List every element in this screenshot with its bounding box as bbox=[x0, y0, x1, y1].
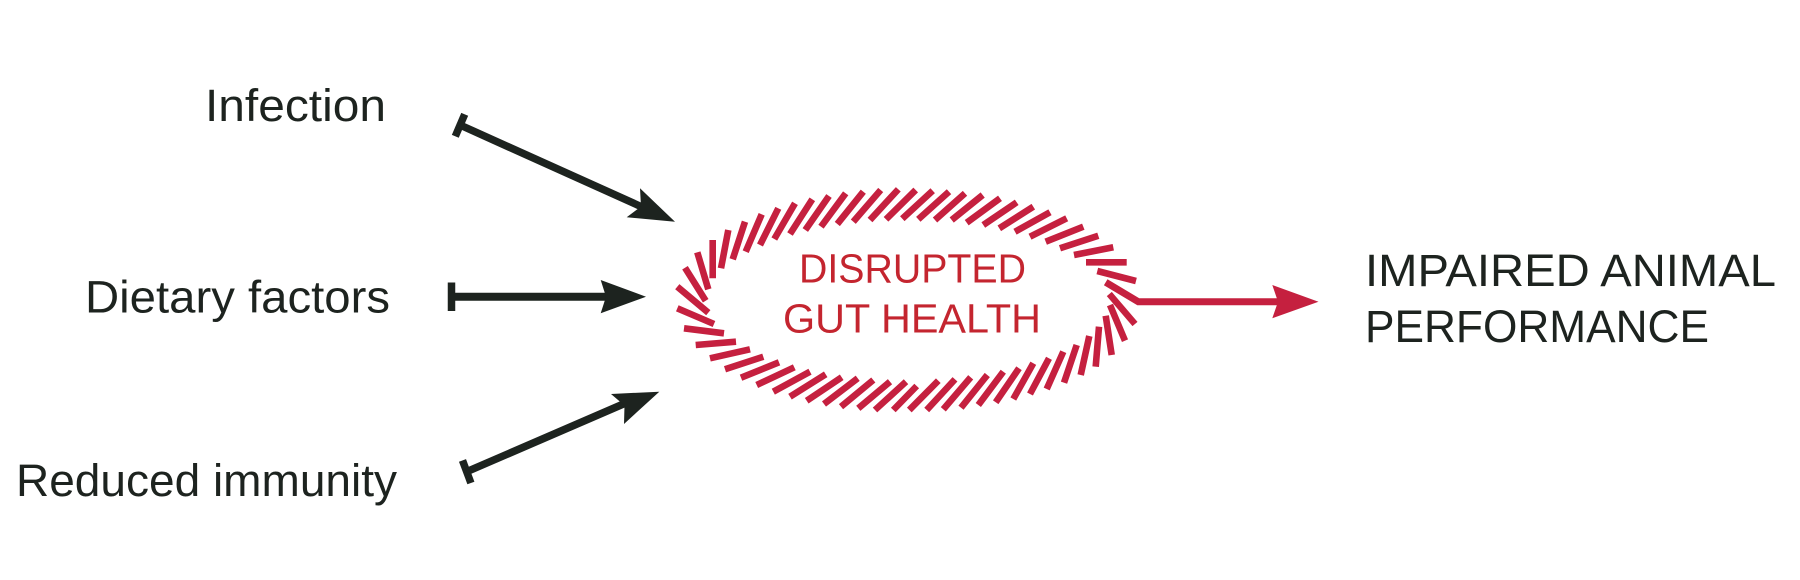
arrow: infection to gut health bbox=[455, 114, 675, 222]
hatched ellipse bbox=[677, 189, 1136, 410]
center text: disrupted gut health: GUT HEALTH bbox=[783, 296, 1041, 342]
center text: disrupted gut health: DISRUPTED bbox=[799, 246, 1026, 292]
arrow: reduced immunity to gut health bbox=[462, 392, 659, 483]
arrow: gut health to impaired performance bbox=[1106, 282, 1318, 318]
outcome text: impaired animal performance: PERFORMANCE bbox=[1365, 301, 1709, 352]
outcome text: impaired animal performance: IMPAIRED ANIMAL bbox=[1365, 245, 1776, 296]
center text: disrupted gut health bbox=[783, 246, 1041, 342]
arrow: dietary factors to gut health bbox=[451, 280, 646, 313]
outcome text: impaired animal performance bbox=[1365, 245, 1776, 352]
label: Dietary factors: Dietary factors bbox=[85, 272, 390, 322]
label: Infection: Infection bbox=[205, 80, 386, 131]
label: Reduced immunity: Reduced immunity bbox=[16, 455, 398, 506]
